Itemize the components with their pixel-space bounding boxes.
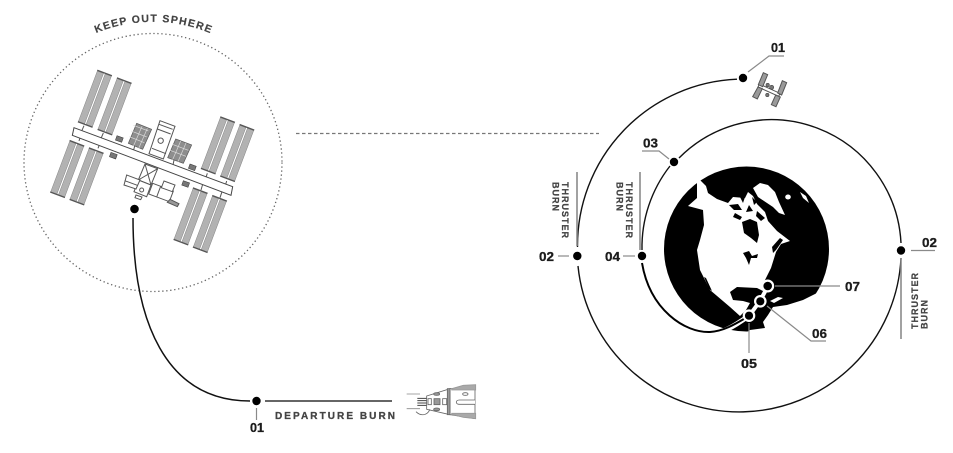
icon: spacecraft	[407, 385, 476, 419]
marker 05	[744, 310, 754, 321]
hudson bay, lakes and arctic channels	[704, 195, 783, 291]
label: 01: 01	[771, 40, 785, 55]
thruster burn label: left inner: BURN	[614, 182, 624, 212]
connector dashed line	[296, 132, 599, 134]
label: 04: 04	[605, 249, 621, 264]
label: 01 departure: 01	[250, 420, 264, 435]
thruster burn label: left inner: THRUSTER	[624, 182, 634, 239]
orbit dot 02 left	[573, 252, 582, 260]
label: departure burn: DEPARTURE BURN	[275, 411, 395, 422]
outer orbit lower arc	[578, 258, 901, 412]
label: 05: 05	[741, 356, 757, 371]
burn bar: right	[900, 258, 902, 339]
greenland	[753, 183, 785, 215]
label: 07: 07	[845, 279, 860, 294]
orbit dot 04	[638, 252, 646, 260]
descent trajectory outline	[700, 316, 749, 333]
descent trajectory	[642, 263, 749, 332]
eastern edge and south america	[742, 262, 835, 345]
cuba	[770, 297, 783, 303]
small arrays	[753, 73, 787, 107]
truss	[72, 128, 233, 195]
label: 02 right: 02	[922, 235, 937, 250]
outer orbit upper arc	[577, 79, 737, 247]
thruster burn label: left outer: THRUSTER	[560, 182, 570, 239]
orbit dot 03	[670, 158, 678, 166]
leader: 02 right	[911, 250, 935, 252]
centre module	[149, 121, 175, 159]
leader: 03	[642, 151, 669, 159]
marker 06	[755, 296, 766, 306]
label: 06: 06	[812, 326, 827, 341]
leader: 04	[623, 255, 635, 257]
leader: departure 01	[256, 408, 258, 420]
iceland	[785, 194, 791, 200]
radiator grids	[128, 123, 192, 163]
leader: 01	[748, 56, 784, 72]
burn bar: left outer	[576, 172, 578, 246]
leader: 02 left	[558, 255, 569, 257]
globe	[664, 166, 835, 345]
inner orbit left arc	[642, 166, 670, 250]
heading: keep out sphere: KEEP OUT SPHERE	[94, 14, 212, 34]
ocean disc	[664, 166, 829, 332]
orbit dot 02 right	[897, 246, 905, 255]
thruster burn label: right: BURN	[920, 299, 930, 329]
orbit dot 01	[739, 74, 747, 82]
inner orbit upper arc	[679, 120, 901, 243]
leader: 05	[748, 323, 750, 353]
departure trajectory	[133, 218, 250, 401]
keep out sphere boundary	[24, 34, 282, 292]
departure burn line	[265, 400, 392, 402]
departure dot 01	[252, 397, 261, 405]
small modules	[766, 83, 774, 97]
continents	[688, 168, 835, 345]
space station: large	[50, 70, 254, 253]
marker 07	[762, 281, 773, 291]
thruster burn label: right: THRUSTER	[910, 272, 920, 329]
solar arrays	[50, 70, 254, 253]
northeast coast fleck	[800, 192, 809, 203]
array connectors	[79, 126, 227, 198]
icon: small space station	[753, 73, 787, 107]
leader: 06	[767, 306, 826, 341]
thruster burn label: left outer: BURN	[550, 182, 560, 212]
burn bar: left inner	[639, 172, 641, 250]
departure start dot	[130, 205, 139, 213]
lower modules	[124, 164, 179, 207]
small truss attachments	[109, 136, 196, 187]
small truss	[758, 84, 780, 96]
label: 02 left: 02	[539, 249, 554, 264]
leader: 07	[775, 285, 840, 287]
label: 03: 03	[643, 136, 658, 150]
connector between burn markers	[749, 286, 768, 316]
north america	[688, 168, 790, 316]
